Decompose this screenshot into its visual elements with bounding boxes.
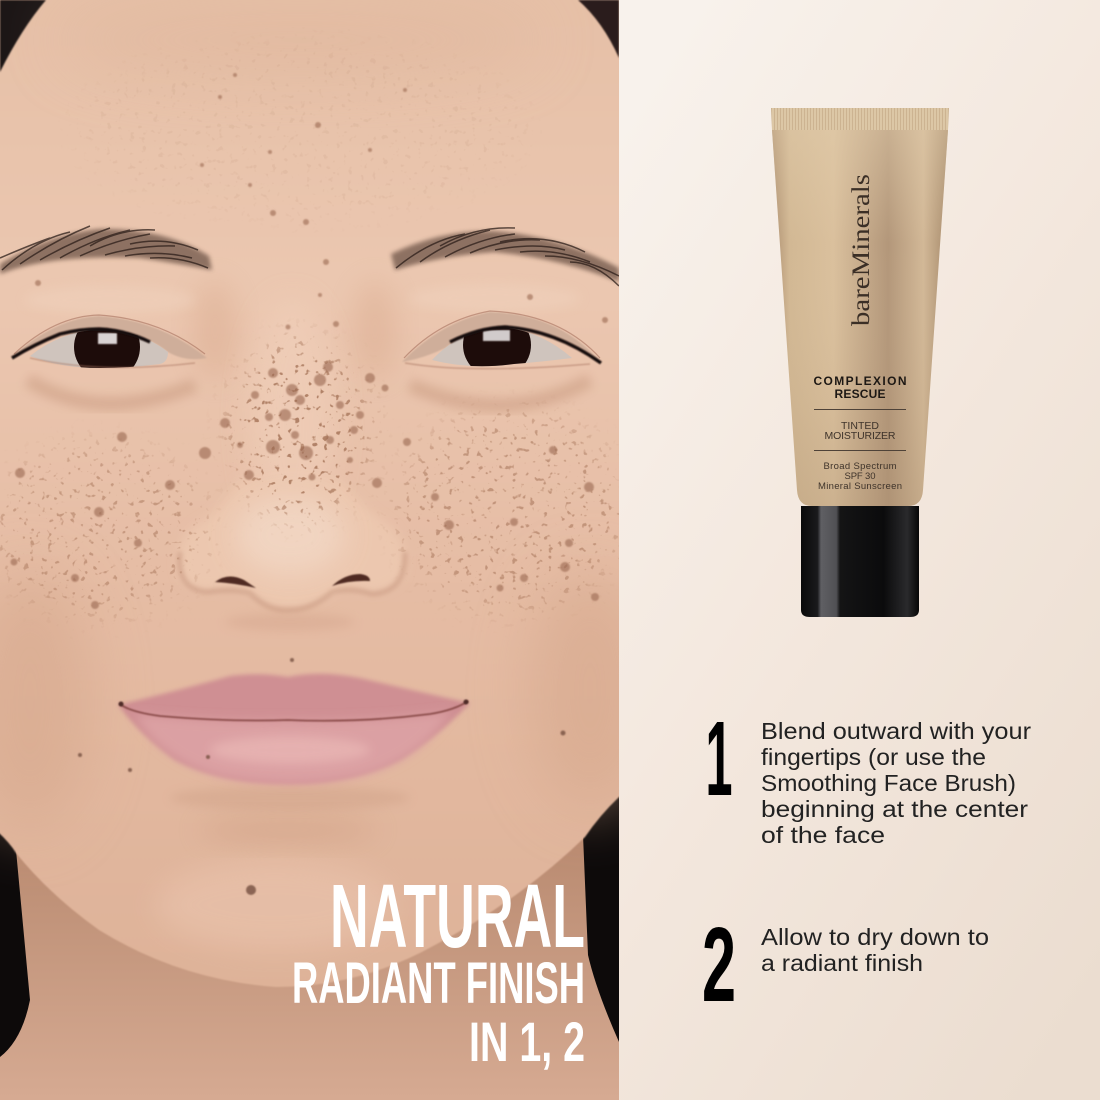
product labels — [814, 374, 906, 492]
right eyelid — [402, 312, 601, 363]
product labels: SPF 30 — [844, 471, 876, 482]
lips — [118, 674, 470, 784]
nose bridge and nose — [262, 358, 322, 476]
step 1 text — [761, 718, 1031, 848]
headline line: radiant finish: RADIANT FINISH — [292, 951, 585, 1016]
tube cap — [801, 506, 919, 617]
headline — [292, 867, 585, 1073]
left eyelid — [12, 316, 207, 359]
face skin — [0, 0, 630, 987]
eye sockets — [28, 380, 195, 404]
nostrils — [215, 576, 256, 588]
hair backdrop — [0, 796, 619, 1057]
product labels: TINTED — [841, 420, 879, 432]
nose outline shading — [180, 552, 405, 610]
text: 1 — [706, 700, 732, 818]
tube body — [772, 130, 948, 506]
chin crease — [240, 821, 336, 840]
neck — [0, 835, 619, 1100]
inner eye shading — [194, 290, 236, 369]
left eye — [10, 314, 206, 369]
step 2 text: a radiant finish — [761, 950, 923, 976]
scattered freckle texture — [0, 325, 619, 622]
brand name: bareMinerals — [848, 174, 875, 326]
background panel — [619, 0, 1100, 1100]
step 1 text: of the face — [761, 822, 885, 848]
step 1 text: Blend outward with your — [761, 718, 1031, 744]
product labels: MOISTURIZER — [824, 430, 896, 442]
headline line: natural: NATURAL — [330, 867, 585, 967]
step 1 text: beginning at the center — [761, 796, 1028, 822]
freckles — [10, 73, 608, 609]
tube crimp — [771, 108, 949, 130]
chin moles — [78, 658, 566, 895]
cheek and side tones — [0, 570, 90, 830]
hair top corners — [0, 0, 46, 72]
product labels: Broad Spectrum — [824, 461, 897, 472]
step 2 number: 2 — [702, 906, 736, 1024]
right eyebrow — [391, 228, 619, 286]
lip shadow — [185, 790, 395, 805]
product labels: COMPLEXION — [814, 374, 906, 388]
chin highlight — [170, 871, 380, 941]
step 1 text: fingertips (or use the — [761, 744, 986, 770]
product labels: Mineral Sunscreen — [818, 481, 902, 492]
portrait photo of freckled face — [0, 0, 650, 1100]
product tube — [771, 108, 949, 617]
right eye — [403, 310, 603, 370]
product labels: RESCUE — [834, 387, 886, 401]
step 1 text: Smoothing Face Brush) — [761, 770, 1016, 796]
step 2 text: Allow to dry down to — [761, 924, 989, 950]
step 2 text — [761, 924, 989, 976]
headline line: in 1, 2: IN 1, 2 — [469, 1010, 585, 1073]
left eyebrow — [0, 226, 212, 274]
